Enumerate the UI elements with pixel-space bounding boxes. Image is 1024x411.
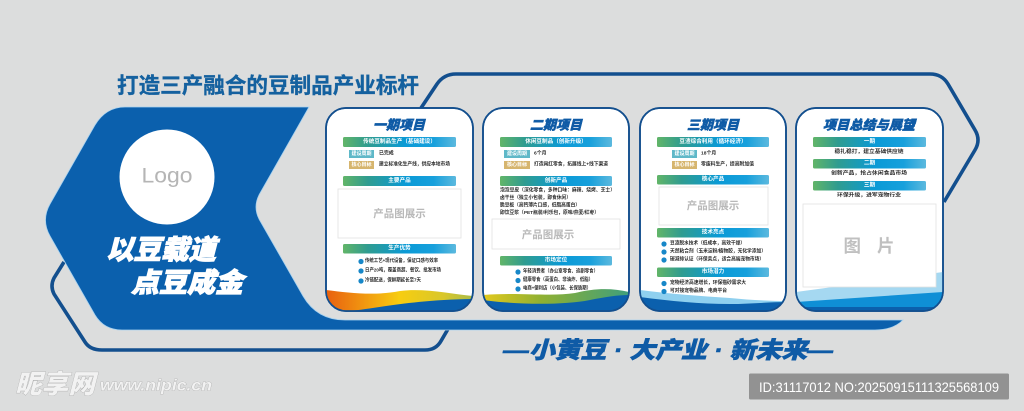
summary: phase one: 稳扎稳打，建立基础供应链 bbox=[834, 148, 904, 155]
bullet list: technology bbox=[661, 240, 766, 263]
section bar: innovative products: 创新产品 bbox=[545, 176, 568, 184]
section bar: leisure products: 休闲豆制品（创新升级） bbox=[525, 137, 587, 145]
logo circle bbox=[120, 130, 214, 224]
section bar: traditional products: 传统豆制品生产（基础建设） bbox=[363, 137, 436, 145]
bullet list: market potential: 宠物经济高速增长，环保猫砂需求大 bbox=[670, 279, 746, 286]
summary: phase one bbox=[813, 137, 926, 155]
tag row: goal: 零废料生产，提高附加值 bbox=[701, 160, 754, 168]
tag row: period: 6个月 bbox=[534, 150, 547, 156]
panel: phase three bbox=[640, 108, 786, 311]
tag row: goal bbox=[349, 160, 450, 169]
heading: summary: 项目总结与展望 bbox=[823, 118, 917, 132]
summary: phase two: 创新产品，抢占休闲食品市场 bbox=[831, 170, 907, 176]
upper outline arrow bbox=[421, 74, 978, 202]
product image placeholder bbox=[338, 189, 461, 238]
section bar: leisure products bbox=[500, 137, 612, 147]
section bar: market positioning: 市场定位 bbox=[545, 256, 568, 264]
picture placeholder bbox=[803, 204, 936, 287]
tag row: goal: 打造网红零食，拓展线上+线下渠道 bbox=[534, 160, 608, 168]
product text list: 卤干丝（独立小包装，即食休闲） bbox=[500, 194, 571, 201]
section bar: technology bbox=[657, 228, 769, 238]
product text list bbox=[500, 186, 615, 216]
product text list: 脆豆板（高钙薄片口感，低脂高蛋白） bbox=[500, 202, 580, 208]
tag row: period: 建设周期 bbox=[507, 150, 527, 157]
section bar: market potential bbox=[657, 267, 769, 277]
slogan: 点豆成金 bbox=[131, 268, 247, 298]
lower outline arrow bbox=[52, 262, 448, 350]
section bar: traditional products bbox=[343, 137, 456, 147]
tag row: goal: 核心目标 bbox=[674, 161, 695, 168]
section bar: main products bbox=[343, 176, 456, 186]
bullet list: market potential: 可对接宠物品牌、电商平台 bbox=[670, 287, 727, 294]
tag row: period bbox=[504, 150, 547, 158]
tag row: goal: 建立标准化生产线，供应本地市场 bbox=[379, 160, 450, 168]
heading: phase one: 一期项目 bbox=[373, 118, 426, 132]
bullet list: advantages: 日产20吨，覆盖商超、餐饮、批发市场 bbox=[365, 266, 441, 274]
tag row: period: 建设周期 bbox=[351, 150, 372, 157]
tag row: period: 18个月 bbox=[701, 150, 716, 156]
section bar: market positioning bbox=[500, 256, 612, 266]
main blue arrow panel bbox=[46, 107, 903, 330]
tag row: goal bbox=[504, 160, 608, 169]
section bar: okara use bbox=[657, 137, 769, 147]
bullet list: advantages bbox=[358, 257, 441, 284]
section bar: production advantages: 生产优势 bbox=[388, 244, 411, 252]
bullet list: market: 年轻消费者（办公室零食、追剧零食） bbox=[523, 268, 598, 274]
panel: summary and outlook bbox=[796, 108, 943, 311]
slogan bbox=[106, 235, 247, 298]
bullet list: technology: 天然粘合剂（玉米淀粉/植物胶，无化学添加） bbox=[670, 248, 766, 254]
section bar: market potential: 市场潜力 bbox=[702, 267, 725, 275]
tag row: period bbox=[672, 150, 716, 158]
section bar: technology: 技术亮点 bbox=[702, 228, 725, 236]
watermark: 昵享网 bbox=[15, 369, 99, 399]
section bar: okara use: 豆渣综合利用（循环经济） bbox=[679, 137, 747, 145]
wave: phase one bbox=[326, 290, 473, 311]
watermark bbox=[15, 369, 212, 399]
slogan: 以豆载道 bbox=[106, 235, 220, 265]
tag row: period bbox=[349, 150, 394, 158]
section bar: production advantages bbox=[343, 244, 456, 254]
logo circle: Logo bbox=[142, 164, 192, 188]
section bar: core products: 核心产品 bbox=[702, 175, 725, 183]
tag row: period: 已完成 bbox=[379, 150, 394, 156]
summary: phase one: 一期 bbox=[864, 137, 875, 145]
product image placeholder: 产品图展示 bbox=[373, 207, 426, 220]
tag row: goal: 核心目标 bbox=[507, 161, 527, 168]
panel: phase two bbox=[483, 108, 629, 311]
bullet list: technology: 豆渣脱水技术（低成本，高效干燥） bbox=[670, 240, 745, 246]
tag row: goal: 核心目标 bbox=[351, 161, 372, 168]
product image placeholder: 产品图展示 bbox=[522, 228, 574, 241]
bullet list: market: 健康零食（高蛋白、非油炸、低脂） bbox=[523, 276, 593, 283]
watermark: www.nipic.cn bbox=[100, 378, 212, 394]
product image placeholder bbox=[492, 219, 620, 249]
heading: phase two: 二期项目 bbox=[530, 118, 583, 132]
section bar: main products: 主要产品 bbox=[388, 176, 411, 184]
picture placeholder: 图 片 bbox=[844, 236, 894, 256]
product image placeholder bbox=[659, 187, 768, 225]
bullet list: technology: 碳减排认证（环保卖点，适合高端宠物市场） bbox=[670, 256, 764, 262]
product text list: 即饮豆浆（PET瓶装/利乐包，原味/燕麦/红枣） bbox=[500, 209, 599, 216]
panel: phase one bbox=[326, 108, 473, 311]
wave: phase three bbox=[640, 290, 786, 311]
bullet list: market bbox=[515, 268, 598, 292]
bullet list: advantages: 冷链配送，保鲜期延长至7天 bbox=[365, 276, 421, 284]
summary: phase three: 环保升级，进军宠物行业 bbox=[837, 192, 901, 198]
section bar: core products bbox=[657, 175, 769, 184]
summary: phase two bbox=[813, 159, 926, 176]
bullet list: advantages: 传统工艺+现代设备，保证口感与效率 bbox=[365, 257, 438, 264]
heading: phase three: 三期项目 bbox=[687, 118, 740, 132]
summary: phase three: 三期 bbox=[864, 181, 875, 189]
summary: phase two: 二期 bbox=[864, 159, 875, 167]
product image placeholder: 产品图展示 bbox=[687, 199, 739, 212]
tag row: goal bbox=[672, 160, 754, 169]
product text list: 泡泡豆皮（深化零食，多种口味：麻辣、烧烤、芝士） bbox=[500, 186, 615, 194]
tagline: —小黄豆 · 大产业 · 新未来— bbox=[502, 337, 834, 363]
section bar: innovative products bbox=[500, 176, 612, 186]
title: 打造三产融合的豆制品产业标杆 bbox=[117, 74, 419, 98]
wave: summary bbox=[796, 272, 943, 311]
bullet list: market potential bbox=[661, 279, 746, 294]
image id badge: ID:31117012 NO:20250915111325568109 bbox=[759, 379, 999, 395]
bullet list: market: 电商+便利店（小包装、长保质期） bbox=[523, 284, 591, 292]
wave: phase two bbox=[483, 289, 629, 311]
summary: phase three bbox=[813, 181, 926, 198]
image id badge bbox=[749, 374, 1009, 400]
tag row: period: 建设周期 bbox=[674, 150, 695, 157]
